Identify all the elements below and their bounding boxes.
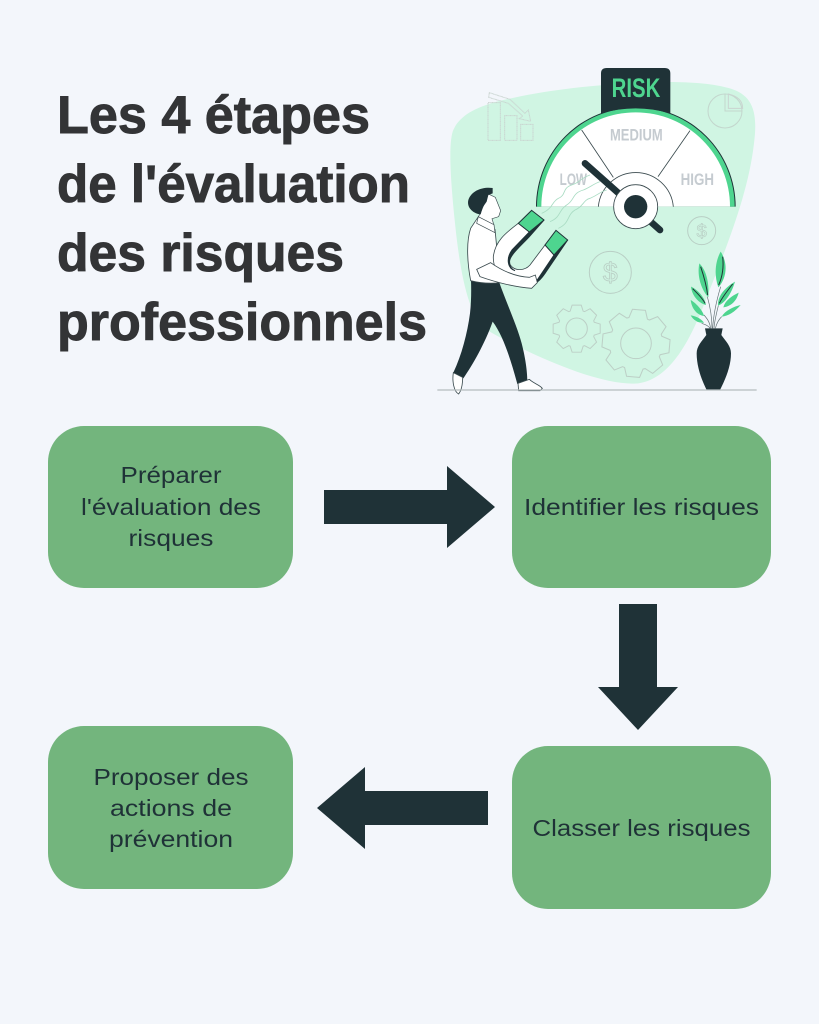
step 4 box: actions de <box>110 795 232 821</box>
magnetic waves <box>542 175 607 228</box>
magnet poles <box>518 210 544 232</box>
illustration: risk gauge and man with magnet <box>437 68 757 394</box>
floor line <box>437 388 757 392</box>
faded dollar icons <box>589 217 716 293</box>
arrow: step 1 to step 2 <box>324 466 495 548</box>
collar <box>477 217 495 233</box>
forearm and hand <box>477 263 537 288</box>
man <box>453 188 568 394</box>
gauge: HIGH <box>681 171 714 189</box>
step 1 box: risques <box>128 525 214 551</box>
gauge: LOW <box>560 171 587 189</box>
gauge needle <box>585 163 660 230</box>
trousers <box>453 280 527 384</box>
title <box>57 86 427 352</box>
shirt <box>468 217 501 283</box>
gauge labels: MEDIUM <box>610 127 663 145</box>
step 3 box <box>512 746 771 909</box>
faded pie icon <box>708 94 743 128</box>
magnet <box>493 210 568 286</box>
background blob <box>450 82 755 384</box>
step 1 box: Préparer <box>120 462 222 488</box>
magnet shadow <box>508 220 568 283</box>
title: Les 4 étapes <box>57 86 370 145</box>
faded dollar icons: $ <box>696 220 707 241</box>
step 3 box: Classer les risques <box>532 815 750 841</box>
step 2 box <box>512 426 771 588</box>
risk badge <box>601 68 670 113</box>
hair <box>468 188 493 214</box>
step 1 box <box>48 426 293 588</box>
title: des risques <box>57 224 344 283</box>
step 2 box: Identifier les risques <box>524 494 759 520</box>
title: de l'évaluation <box>57 155 410 214</box>
title: professionnels <box>57 293 427 352</box>
shoes <box>453 373 463 394</box>
step 1 box: l'évaluation des <box>81 494 261 520</box>
gauge <box>536 107 736 207</box>
arrow: step 3 to step 4 <box>317 767 488 849</box>
plant <box>691 252 741 390</box>
vase <box>697 328 731 390</box>
faded chart icon <box>488 93 533 140</box>
arrow: step 2 to step 3 <box>598 604 678 730</box>
step 4 box: Proposer des <box>94 764 248 790</box>
face and neck <box>478 194 501 225</box>
step 4 box: prévention <box>109 826 233 852</box>
faded dollar icons: $ <box>603 258 618 288</box>
risk badge: RISK <box>612 73 660 103</box>
step 4 box <box>48 726 293 889</box>
faded gears <box>553 305 672 380</box>
